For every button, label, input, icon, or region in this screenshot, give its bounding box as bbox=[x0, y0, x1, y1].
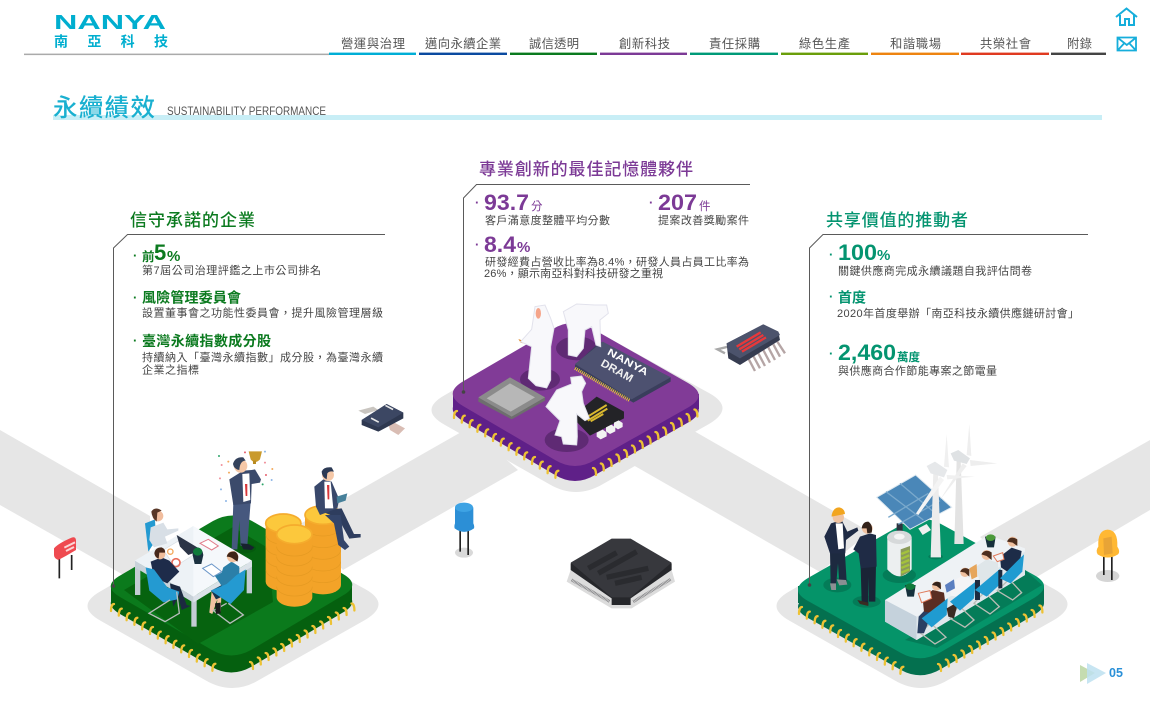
text block: 信守承諾的企業: 臺灣永續指數成分股 bbox=[142, 333, 271, 349]
text block: 信守承諾的企業: 設置董事會之功能性委員會，提升風險管理層級 bbox=[142, 306, 383, 320]
text block: 專業創新的最佳記憶體夥伴: 客戶滿意度整體平均分數 bbox=[485, 213, 610, 227]
text block: 信守承諾的企業: 企業之指標 bbox=[142, 362, 199, 376]
wind turbines bbox=[916, 424, 997, 559]
text block: 共享價值的推動者: 首度 bbox=[838, 290, 866, 306]
text block: 共享價值的推動者: 2,460 bbox=[838, 340, 896, 365]
header logo: 南亞科技 bbox=[54, 34, 168, 50]
text block: 信守承諾的企業: · bbox=[133, 248, 137, 263]
text block: 專業創新的最佳記憶體夥伴: 專業創新的最佳記憶體夥伴 bbox=[479, 160, 693, 179]
navigation bar: 和諧職場 bbox=[890, 36, 941, 51]
text block: 專業創新的最佳記憶體夥伴: · bbox=[475, 237, 479, 252]
text block: 專業創新的最佳記憶體夥伴: 研發經費占營收比率為8.4%，研發人員占員工比率為 bbox=[485, 254, 749, 268]
chip: red striped component bbox=[717, 324, 785, 371]
page title: SUSTAINABILITY PERFORMANCE bbox=[167, 104, 326, 118]
text block: 信守承諾的企業: 第7屆公司治理評鑑之上市公司排名 bbox=[142, 263, 321, 277]
platform: teal shared value bbox=[798, 519, 1044, 675]
navigation bar: 附錄 bbox=[1067, 37, 1092, 51]
text block: 專業創新的最佳記憶體夥伴: 93.7 bbox=[484, 190, 529, 215]
navigation bar: 邁向永續企業 bbox=[425, 36, 501, 51]
long table bbox=[885, 534, 1025, 640]
text block: 共享價值的推動者: · bbox=[829, 346, 833, 361]
navigation bar: 共榮社會 bbox=[980, 36, 1031, 51]
text block: 共享價值的推動者: 萬度 bbox=[897, 350, 920, 364]
text block: 共享價值的推動者: 與供應商合作節能專案之節電量 bbox=[838, 364, 997, 378]
callout frame: innovation bbox=[462, 184, 750, 394]
text block: 信守承諾的企業: % bbox=[167, 248, 180, 265]
person: engineer with helmet bbox=[823, 507, 858, 592]
text block: 專業創新的最佳記憶體夥伴: 207 bbox=[658, 190, 697, 215]
person: woman at table, front right bbox=[209, 551, 246, 623]
text block: 信守承諾的企業: 5 bbox=[154, 240, 166, 265]
text block: 共享價值的推動者: 關鍵供應商完成永續議題自我評估問卷 bbox=[838, 264, 1032, 278]
callout frame: governance bbox=[112, 234, 385, 588]
page number: 05 bbox=[1109, 666, 1123, 680]
navigation bar: 綠色生產 bbox=[799, 36, 850, 51]
page title bbox=[53, 94, 1102, 122]
text block: 專業創新的最佳記憶體夥伴: 分 bbox=[531, 200, 543, 213]
chip: black with white pads bbox=[572, 397, 624, 439]
scene: clean room engineers and chips bbox=[478, 304, 785, 452]
text block: 共享價值的推動者: 共享價值的推動者 bbox=[826, 211, 968, 230]
chip: DRAM: DRAM bbox=[599, 357, 635, 385]
header logo: NANYA bbox=[54, 12, 166, 34]
component: yellow LED bbox=[1096, 530, 1119, 582]
confetti bbox=[218, 451, 273, 502]
platform: green governance bbox=[111, 516, 354, 672]
person: seated man on coins bbox=[314, 467, 361, 550]
text block: 共享價值的推動者 bbox=[826, 211, 1079, 378]
coin stacks bbox=[266, 506, 341, 607]
text block: 信守承諾的企業: · bbox=[133, 290, 137, 305]
text block: 專業創新的最佳記憶體夥伴: · bbox=[649, 195, 653, 210]
text block: 共享價值的推動者: · bbox=[829, 289, 833, 304]
person: bending engineer bbox=[563, 304, 608, 357]
person: standing man with trophy bbox=[229, 451, 262, 553]
text block: 信守承諾的企業: 前 bbox=[142, 249, 155, 264]
person: standing engineer bbox=[518, 305, 554, 388]
text block: 專業創新的最佳記憶體夥伴: 26%，顯示南亞科對科技研發之重視 bbox=[484, 266, 663, 280]
text block: 信守承諾的企業: 持續納入「臺灣永續指數」成分股，為臺灣永續 bbox=[142, 350, 383, 364]
text block: 共享價值的推動者: % bbox=[877, 247, 890, 264]
chip: DRAM: NANYA bbox=[605, 347, 650, 378]
text block: 信守承諾的企業: · bbox=[133, 333, 137, 348]
background road bands bbox=[0, 327, 1150, 688]
battery bbox=[883, 531, 916, 583]
chip: grey processor bbox=[478, 377, 545, 419]
table bbox=[135, 526, 252, 627]
text block: 專業創新的最佳記憶體夥伴: · bbox=[475, 195, 479, 210]
navigation bar: 營運與治理 bbox=[341, 36, 405, 51]
scene: green energy and team bbox=[823, 424, 1025, 644]
navigation bar: 責任採購 bbox=[709, 37, 760, 51]
navigation bar: 誠信透明 bbox=[529, 37, 579, 51]
solar panel bbox=[877, 475, 952, 535]
text block: 信守承諾的企業 bbox=[130, 210, 383, 376]
navigation bar: 創新科技 bbox=[619, 36, 670, 51]
header logo bbox=[54, 12, 168, 50]
text block: 共享價值的推動者: · bbox=[829, 247, 833, 262]
text block: 專業創新的最佳記憶體夥伴 bbox=[475, 160, 749, 280]
page number bbox=[1080, 663, 1123, 684]
scene: meeting and coins bbox=[135, 451, 361, 627]
text block: 專業創新的最佳記憶體夥伴: 8.4 bbox=[484, 232, 517, 257]
icon: mail bbox=[1118, 38, 1136, 50]
text block: 共享價值的推動者: 100 bbox=[838, 240, 877, 265]
text block: 信守承諾的企業: 信守承諾的企業 bbox=[130, 210, 255, 230]
text block: 共享價值的推動者: 2020年首度舉辦「南亞科技永續供應鏈研討會」 bbox=[837, 306, 1079, 320]
platform: purple innovation bbox=[453, 323, 699, 481]
text block: 專業創新的最佳記憶體夥伴: 件 bbox=[699, 199, 710, 213]
chip: DRAM bbox=[575, 342, 671, 403]
page title: 永續績效 bbox=[53, 94, 155, 122]
person: woman at table bbox=[145, 509, 178, 552]
text block: 專業創新的最佳記憶體夥伴: 提案改善獎勵案件 bbox=[658, 213, 749, 227]
component: blue capacitor bbox=[454, 503, 474, 558]
text block: 專業創新的最佳記憶體夥伴: % bbox=[517, 239, 530, 256]
component: red capacitor bbox=[54, 537, 76, 578]
component: black QFP chip bbox=[567, 539, 675, 608]
seated team with blue chairs bbox=[917, 537, 1024, 644]
navigation bar bbox=[24, 36, 1106, 55]
person: man at table, front left bbox=[146, 547, 191, 622]
icon: home bbox=[1116, 8, 1137, 25]
text block: 信守承諾的企業: 風險管理委員會 bbox=[142, 290, 241, 306]
component: small dark transistor bbox=[358, 404, 405, 435]
person: crouching engineer bbox=[546, 376, 589, 445]
callout frame: shared value bbox=[808, 234, 1088, 587]
person: man facing engineer bbox=[853, 522, 881, 608]
